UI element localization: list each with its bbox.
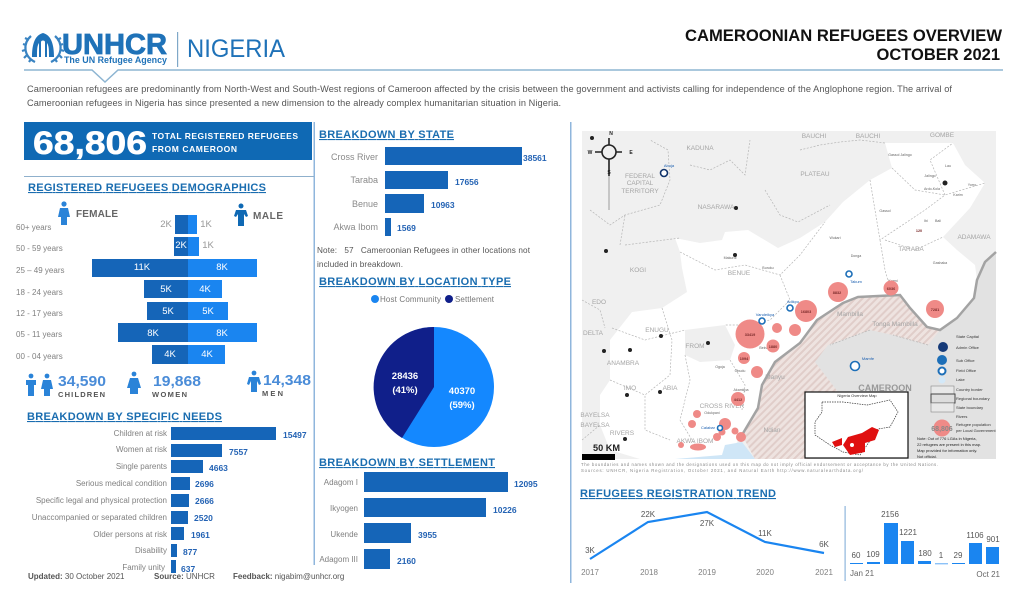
map: town labels: Gassol xyxy=(879,209,891,213)
female bars xyxy=(92,215,188,364)
map: legend: Not official. xyxy=(917,454,937,459)
age labels: 05 - 11 years xyxy=(16,330,62,339)
age labels: 00 - 04 years xyxy=(16,352,63,361)
bar chart: state: 38561 xyxy=(523,153,547,163)
map: state labels: BAUCHI xyxy=(802,133,826,140)
map: state labels: ENUGU xyxy=(645,327,669,334)
map: office names: Takum xyxy=(850,279,863,284)
heading: location type: BREAKDOWN BY LOCATION TYPE xyxy=(319,276,511,288)
map: circle values: 4412 xyxy=(734,398,742,402)
bar chart: monthly registrations: 1106 xyxy=(966,531,984,540)
female label: FEMALE xyxy=(76,209,118,220)
title: CAMEROONIAN REFUGEES OVERVIEW xyxy=(685,27,1002,45)
pyramid values: 2K xyxy=(160,219,172,230)
bar chart: specific needs: Single parents xyxy=(116,462,167,471)
age labels: 12 - 17 years xyxy=(16,309,63,318)
stat: men xyxy=(247,371,311,398)
heading: settlement: BREAKDOWN BY SETTLEMENT xyxy=(319,457,495,469)
map: state labels: ADAMAWA xyxy=(957,234,991,241)
icon: compass xyxy=(588,131,633,210)
age labels: 25 – 49 years xyxy=(16,266,64,275)
map: state labels: Ndian xyxy=(764,427,781,434)
bar chart: monthly registrations: 60 xyxy=(852,551,861,560)
country name: NIGERIA xyxy=(187,35,285,63)
map: town labels: Obudu xyxy=(735,369,745,373)
heading: demographics: REGISTERED REFUGEES DEMOGRAPHICS xyxy=(28,182,266,194)
map: town labels: Lau xyxy=(945,164,951,168)
map: legend: Field Office xyxy=(956,368,977,373)
stat: men: 14,348 xyxy=(263,372,311,389)
map: legend: State boundary xyxy=(956,405,983,410)
map: circle values: 1094 xyxy=(740,357,749,361)
map: state labels: EDO xyxy=(592,299,606,306)
bar chart: monthly registrations xyxy=(850,510,1001,579)
icon: compass: S xyxy=(607,170,611,176)
pyramid values: 1K xyxy=(202,240,214,251)
map: town labels: Gashaka xyxy=(933,261,947,265)
bar chart: specific needs: Serious medical condition xyxy=(76,479,167,488)
pie chart: (41%) xyxy=(392,385,418,396)
icon: male xyxy=(234,204,248,226)
bar chart: state: Akwa Ibom xyxy=(333,222,378,232)
line chart: annual registrations: 3K xyxy=(585,546,596,555)
bar chart: specific needs: Family unity xyxy=(122,563,165,572)
map: legend: Rivers xyxy=(956,414,967,419)
pyramid values: 11K xyxy=(134,262,151,273)
map: state labels: DELTA xyxy=(583,330,604,337)
map: state labels: CROSS RIVER xyxy=(700,403,745,410)
map disclaimer: Sources: UNHCR, Nigeria Registration, October 2021, and Natural Earth http://www.naturalearthdata.org/ xyxy=(581,468,864,473)
map: town labels xyxy=(704,153,976,415)
map: legend: Regional boundary xyxy=(956,396,990,401)
bar chart: settlement: 10226 xyxy=(493,505,517,515)
bar chart: monthly registrations: 2156 xyxy=(881,510,899,519)
map: town labels: Makurdi xyxy=(724,256,737,260)
pie chart: (59%) xyxy=(449,400,475,411)
map: town labels: Yorro xyxy=(968,183,976,187)
pyramid values: 5K xyxy=(160,284,172,295)
footer: Feedback: nigabim@unhcr.org xyxy=(233,572,344,581)
line chart: annual registrations: 2021 xyxy=(815,568,833,577)
pyramid values: 8K xyxy=(147,328,159,339)
map: Ebonyi area xyxy=(685,325,735,362)
note: Note: 57 Cameroonian Refugees in other locations not xyxy=(317,246,531,255)
map: state labels: KADUNA xyxy=(686,145,714,152)
bar chart: specific needs: 2520 xyxy=(194,513,213,523)
note xyxy=(317,246,531,269)
map: state labels: IMO xyxy=(624,385,636,392)
map: legend: Note: Out of 776 LGAs in Nigeria, xyxy=(917,436,977,441)
map: state labels: CAMEROON xyxy=(858,383,912,393)
map: sea xyxy=(675,442,755,459)
bar chart: specific needs xyxy=(32,427,307,574)
heading: registration trend: REFUGEES REGISTRATION TREND xyxy=(580,488,776,500)
pyramid values: 4K xyxy=(164,349,176,360)
bar chart: specific needs: Unaccompanied or separated children xyxy=(32,513,167,522)
map: focus states xyxy=(600,143,985,459)
map: state labels: KOGI xyxy=(630,267,646,274)
bar chart: state xyxy=(331,147,547,236)
map: Cameroon territory xyxy=(742,252,996,459)
map: circle values: 120 xyxy=(916,229,922,233)
bar chart: state: 17656 xyxy=(455,177,479,187)
map: legend: 22 refugees are present in this map. xyxy=(917,442,981,447)
icon: compass: N xyxy=(609,131,613,137)
map: international border xyxy=(742,252,996,435)
map: state labels: TARABA xyxy=(898,246,924,253)
male label: MALE xyxy=(253,211,283,222)
line chart: annual registrations: 22K xyxy=(641,510,656,519)
footer: Updated: 30 October 2021 xyxy=(28,572,125,581)
map: scale bar: 50 KM xyxy=(593,443,620,453)
bar chart: monthly registrations: 29 xyxy=(954,551,963,560)
map: state labels: BAYELSA xyxy=(580,412,610,419)
map: state labels xyxy=(580,132,991,445)
icon: female xyxy=(58,201,70,225)
pyramid values: 1K xyxy=(200,219,212,230)
map: state labels: RIVERS xyxy=(610,430,635,437)
heading: specific needs: BREAKDOWN BY SPECIFIC NEEDS xyxy=(27,411,222,423)
map: office names: Adikpo xyxy=(787,299,800,304)
map: circle values: 7281 xyxy=(931,308,939,312)
icon: compass: W xyxy=(588,150,593,156)
map: legend: Admin Office xyxy=(956,345,980,350)
map: state labels: AKWA IBOM xyxy=(677,438,713,445)
bar chart: specific needs: 15497 xyxy=(283,430,307,440)
map: office names: Calabar xyxy=(701,425,716,430)
pie legend: Settlement xyxy=(455,295,495,304)
stat: men: MEN xyxy=(262,389,283,398)
bar chart: settlement xyxy=(319,472,538,569)
map: state labels: BAUCHI xyxy=(856,133,880,140)
map: office names: Abuja xyxy=(664,163,675,168)
map: legend: Sub Office xyxy=(956,358,975,363)
bar chart: specific needs: Women at risk xyxy=(116,445,168,454)
map: legend: State Capital xyxy=(956,334,979,339)
stat: women: WOMEN xyxy=(152,390,187,399)
pyramid values: 8K xyxy=(216,328,228,339)
map: state labels: CAPITAL xyxy=(627,180,654,187)
map: state labels: ABIA xyxy=(663,385,678,392)
callout: total registered refugees: TOTAL REGISTERED REFUGEES xyxy=(152,131,298,141)
map: town labels: Ogoja xyxy=(715,365,725,369)
stat: women: 19,868 xyxy=(153,373,201,390)
line chart: annual registrations: 2017 xyxy=(581,568,599,577)
map: state labels: ANAMBRA xyxy=(607,360,640,367)
map: town labels: Ibi xyxy=(924,219,928,223)
map: circle values: 16803 xyxy=(801,310,811,314)
intro text: Cameroonian refugees in Nigeria has since presented a new dimension to the already complex humanitarian situation in Nigeria. xyxy=(27,98,561,108)
heading: state: BREAKDOWN BY STATE xyxy=(319,129,454,141)
line chart: annual registrations: 2018 xyxy=(640,568,658,577)
map: office names xyxy=(664,163,875,430)
bar chart: specific needs: Specific legal and physical protection xyxy=(36,496,167,505)
map: town labels: Donga xyxy=(851,254,861,258)
line chart: annual registrations: 2019 xyxy=(698,568,716,577)
stat: children: 34,590 xyxy=(58,373,106,390)
pyramid values: 2K xyxy=(175,240,187,251)
map: town labels: Kurmi xyxy=(888,279,898,283)
map: circle values: 1880 xyxy=(769,345,777,349)
age labels: 60+ years xyxy=(16,223,51,232)
logo: UNHCR emblem and wordmark: UNHCR xyxy=(62,29,167,61)
intro text: Cameroonian refugees are predominantly from North-West and South-West regions of Cameroon affected by the crisis between the government and activists calling for independence of the Anglophone region. The arrival of xyxy=(27,84,952,94)
bar chart: settlement: Ukende xyxy=(330,530,359,539)
bar chart: state: 1569 xyxy=(397,223,416,233)
age labels: 50 - 59 years xyxy=(16,244,63,253)
bar chart: specific needs: 877 xyxy=(183,547,197,557)
pie legend xyxy=(371,295,495,304)
map: town labels: Odukpani xyxy=(704,411,720,415)
pyramid values xyxy=(134,219,228,360)
footer: Source: UNHCR xyxy=(154,572,215,581)
bar chart: state: Cross River xyxy=(331,152,378,162)
map: circle values: 8832 xyxy=(833,291,841,295)
map: state labels: NASARAWA xyxy=(698,204,735,211)
icon: compass: E xyxy=(629,150,633,156)
map: legend: per Local Government xyxy=(956,428,996,433)
map: circle values xyxy=(734,229,939,402)
male bars xyxy=(188,215,257,364)
bar chart: settlement: 12095 xyxy=(514,479,538,489)
age labels xyxy=(16,223,64,361)
map: legend xyxy=(917,334,996,459)
bar chart: settlement: Ikyogen xyxy=(330,504,358,513)
map: town labels: Bali xyxy=(935,219,941,223)
map: state labels: BENUE xyxy=(728,270,751,277)
pyramid values: 4K xyxy=(201,349,213,360)
stat: women xyxy=(127,372,201,399)
bar chart: specific needs: Older persons at risk xyxy=(93,530,168,539)
map: town labels: Jalingo xyxy=(924,174,936,178)
map: town labels: Bekwarra xyxy=(759,346,775,350)
pyramid values: 4K xyxy=(199,284,211,295)
age labels: 18 - 24 years xyxy=(16,288,63,297)
map: circle values: 33419 xyxy=(745,333,755,337)
pyramid values: 8K xyxy=(216,262,228,273)
map: state labels: GOMBE xyxy=(930,132,955,139)
map: town labels: Ardo-Kola xyxy=(924,187,940,191)
stat: children: CHILDREN xyxy=(58,390,105,399)
line chart: annual registrations: 6K xyxy=(819,540,830,549)
map: scale bar xyxy=(582,443,620,460)
map: legend: Map provided for information only. xyxy=(917,448,977,453)
map: state labels: Mambilla xyxy=(837,311,863,318)
map: legend: 68,806 xyxy=(931,426,953,433)
bar chart: state: Benue xyxy=(352,199,378,209)
map: state labels: FROM xyxy=(685,343,705,350)
title: OCTOBER 2021 xyxy=(876,46,1000,64)
pie legend: Host Community xyxy=(380,295,441,304)
bar chart: specific needs: 2696 xyxy=(195,479,214,489)
map: state labels: FEDERAL xyxy=(625,173,655,180)
callout: total registered refugees: FROM CAMEROON xyxy=(152,144,237,154)
bar chart: settlement: Adagom III xyxy=(319,555,358,564)
map: refugee population circles xyxy=(678,280,944,450)
bar chart: monthly registrations: 180 xyxy=(918,549,932,558)
bar chart: specific needs: 637 xyxy=(181,564,195,574)
bar chart: settlement: 3955 xyxy=(418,530,437,540)
map: city markers xyxy=(590,136,948,441)
bar chart: specific needs: Disability xyxy=(135,546,167,555)
bar chart: monthly registrations: 901 xyxy=(986,535,1000,544)
map: hatched border zone xyxy=(742,295,940,459)
population pyramid xyxy=(16,215,257,364)
line chart: annual registrations: 27K xyxy=(700,519,715,528)
map disclaimer: The boundaries and names shown and the designations used on this map do not imply official endorsement or acceptance by the United Nations. xyxy=(581,462,938,467)
pyramid values: 5K xyxy=(202,306,214,317)
map: office names: Mamfe xyxy=(862,356,875,361)
map: inset of Nigeria xyxy=(805,392,908,458)
bar chart: specific needs: 1961 xyxy=(191,530,210,540)
note: included in breakdown. xyxy=(317,260,403,269)
map: state labels: Manyu xyxy=(765,374,785,381)
map: office names: Vandeikya xyxy=(756,312,775,317)
bar chart: state: 10963 xyxy=(431,200,455,210)
map: town labels: Buruku xyxy=(762,266,774,270)
bar chart: monthly registrations: 109 xyxy=(866,550,880,559)
callout: total registered refugees xyxy=(24,122,312,161)
pie chart xyxy=(374,327,494,447)
bar chart: specific needs: 4663 xyxy=(209,463,228,473)
bar chart: monthly registrations: Oct 21 xyxy=(976,570,1001,579)
map: inset of Nigeria: Nigeria Overview Map xyxy=(837,393,877,398)
bar chart: settlement: Adagom I xyxy=(324,478,358,487)
map: state boundaries xyxy=(582,140,985,445)
line chart: annual registrations xyxy=(581,510,833,577)
bar chart: specific needs: 2666 xyxy=(195,496,214,506)
stat: children xyxy=(26,373,106,399)
map: town labels: Akamkpa xyxy=(734,388,748,392)
logo: UNHCR emblem and wordmark: The UN Refugee Agency xyxy=(64,55,168,66)
bar chart: specific needs: Children at risk xyxy=(114,429,168,438)
map: state labels: Tonga Mambilla xyxy=(872,321,918,328)
pyramid values: 5K xyxy=(162,306,174,317)
map: legend: Country border xyxy=(956,387,983,392)
bar chart: state: Taraba xyxy=(350,175,378,185)
bar chart: settlement: 2160 xyxy=(397,556,416,566)
bar chart: monthly registrations: Jan 21 xyxy=(850,569,875,578)
panel: map xyxy=(580,131,996,460)
title xyxy=(685,27,1002,64)
map: legend: Refugee population xyxy=(956,422,991,427)
line chart: annual registrations: 11K xyxy=(758,529,772,538)
map: legend: Lake xyxy=(956,377,965,382)
map disclaimer xyxy=(581,462,938,473)
map: town labels: Karim xyxy=(953,193,963,197)
footer xyxy=(28,572,344,581)
map: town labels: Wukari xyxy=(829,236,841,240)
map: circle values: 6036 xyxy=(887,287,895,291)
map: UNHCR office markers xyxy=(660,170,860,430)
bar chart: monthly registrations: 1221 xyxy=(899,528,917,537)
bar chart: monthly registrations: 1 xyxy=(939,551,944,560)
map: state labels: TERRITORY xyxy=(621,188,659,195)
pie chart: 28436 xyxy=(392,371,418,382)
logo: UNHCR emblem and wordmark xyxy=(22,29,168,66)
callout: total registered refugees: 68,806 xyxy=(33,125,147,161)
map: state labels: BAYELSA xyxy=(580,422,610,429)
bar chart: specific needs: 7557 xyxy=(229,447,248,457)
pie chart: 40370 xyxy=(449,386,475,397)
line chart: annual registrations: 2020 xyxy=(756,568,774,577)
map: town labels: Gassol Jalingo xyxy=(888,153,912,157)
map: state labels: PLATEAU xyxy=(800,171,830,178)
intro text xyxy=(27,84,952,108)
